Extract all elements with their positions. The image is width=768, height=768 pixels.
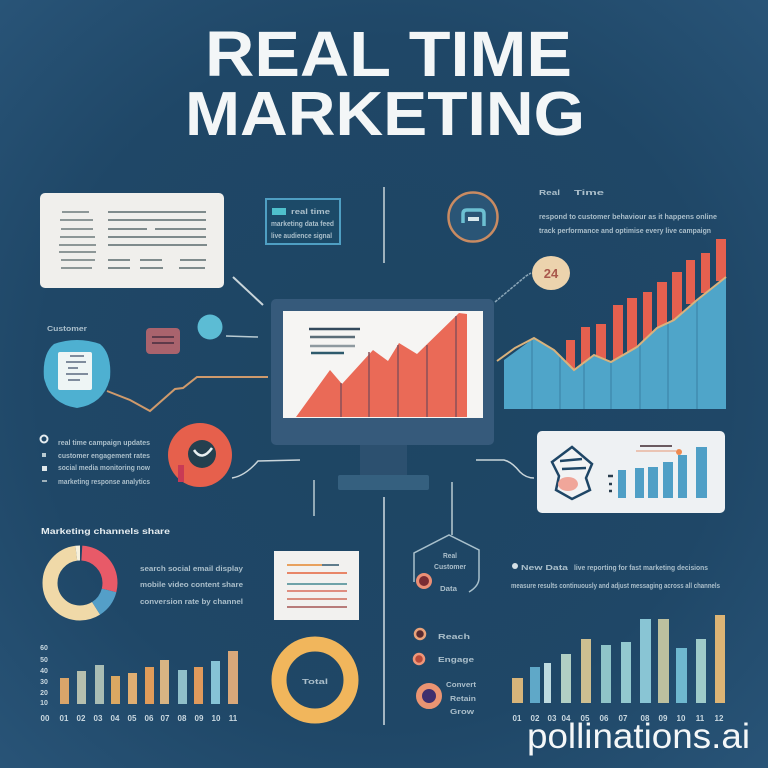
monitor base [338,475,429,490]
connector: red circle [232,460,300,478]
icon: red circle [168,423,232,487]
panel: small blue note card [266,199,340,244]
y axis labels: 40 [40,668,48,675]
bar chart: lower right [512,615,725,723]
icon: pink tag [146,328,180,354]
x axis labels: 10 [212,714,221,723]
card header lines [640,445,672,447]
monitor [271,299,494,490]
text block: lower right: live reporting for fast marketing decisions [574,565,708,572]
x axis labels: 03 [94,714,103,723]
trend line connector [107,377,268,411]
text block: lower right [511,563,720,590]
icon: blue document blob [44,340,110,408]
x axis labels: 04 [562,714,571,723]
legend: lower centre: Grow [450,709,475,716]
y axis labels: 50 [40,657,48,664]
legend: lower centre [414,629,477,716]
legend: lower centre: Engage [438,657,474,664]
hexagon marker [418,574,430,588]
text block: donut description: search social email display [140,566,243,573]
panel: lower right card [537,431,725,513]
blue area [504,277,726,409]
area dividers [532,300,697,409]
trend line [497,277,726,370]
icon: teal circle [198,314,222,340]
x axis labels: 09 [195,714,204,723]
y axis labels: 60 [40,645,48,652]
donut chart [50,553,110,613]
watermark: pollinations.ai [527,717,750,756]
text block: donut description [140,566,243,606]
text list with icons: marketing response analytics [58,479,150,486]
x axis labels: 12 [715,714,724,723]
x axis labels: 11 [696,714,705,723]
icon: hexagon outline: Real [443,553,457,560]
label: blue blob: Customer [47,326,87,333]
x axis labels [513,714,724,723]
x axis labels: 03 [548,714,557,723]
text list with icons: social media monitoring now [58,465,151,472]
panel: white text card [40,193,224,288]
text block: top right: respond to customer behaviour as it happens online [539,214,717,221]
connector: card to monitor [233,277,263,305]
bars [512,615,725,703]
x axis labels: 04 [111,714,120,723]
text block: lower right: measure results continuously and adjust messaging across all channels [511,583,720,590]
text block: top right [539,214,717,235]
title: REAL TIME [205,18,572,90]
bar chart: lower left [40,645,238,723]
title: MARKETING [185,79,585,149]
legend: lower centre: Convert [446,682,477,689]
x axis labels: 02 [77,714,86,723]
x axis labels: 05 [128,714,137,723]
text block: donut description: mobile video content share [140,582,243,589]
text list with icons: real time campaign updates [58,440,150,447]
text block: donut description: conversion rate by channel [140,599,243,606]
y axis labels: 20 [40,690,48,697]
panel: small blue note card: live audience signal [271,233,332,240]
panel: small blue note card: real time [291,209,330,216]
icon: hexagon outline: Data [440,586,457,593]
connector: monitor to lower card [476,460,534,478]
legend: lower centre: Reach [438,634,470,641]
mini bars [618,447,707,498]
icon: hexagon outline: Customer [434,564,466,571]
heading: top right text: Real [539,190,560,197]
monitor body [271,299,494,445]
x axis labels: 10 [677,714,686,723]
text list with icons: customer engagement rates [58,453,150,460]
x axis labels: 11 [229,714,238,723]
icon: orange ring badge [448,192,498,242]
connector: teal circle [226,336,258,337]
axis marks [608,476,613,491]
x axis labels: 01 [513,714,522,723]
divider line: lower left [313,480,315,516]
text block: top right: track performance and optimise every live campaign [539,228,711,235]
panel: small blue note card: marketing data feed [271,221,334,228]
ring chart: Total [302,679,328,686]
x axis labels: 07 [161,714,170,723]
text block: lower right: New Data [521,565,568,572]
x axis labels: 00 [41,714,50,723]
icon: mask [552,447,592,499]
ring chart [279,644,351,716]
icon: beige circle: 24 [544,266,559,281]
red bars [566,239,726,372]
icon: hexagon outline [414,535,479,593]
connector: to hexagon [451,482,453,535]
y axis labels: 10 [40,700,48,707]
title [185,18,585,149]
heading: top right text: Time [574,190,604,197]
x axis labels: 02 [531,714,540,723]
text list with icons [40,436,151,486]
x axis labels: 08 [641,714,650,723]
x axis labels: 06 [145,714,154,723]
x axis labels: 05 [581,714,590,723]
connector: beige circle [495,273,531,302]
screen text lines [309,329,360,353]
y axis labels [40,645,48,707]
icon: beige circle [532,256,570,290]
x axis labels: 06 [600,714,609,723]
bars [60,651,238,704]
panel: report document [274,551,359,620]
screen area chart [296,313,467,417]
heading: top right text [539,190,604,197]
monitor stand [360,444,407,476]
y axis labels: 30 [40,679,48,686]
main chart: bars and area [497,239,726,409]
x axis labels [41,714,238,723]
monitor screen [283,311,483,418]
divider line: top centre [383,187,385,263]
orange marker [676,449,682,455]
divider line: centre [383,497,385,725]
x axis labels: 08 [178,714,187,723]
x axis labels: 07 [619,714,628,723]
x axis labels: 09 [659,714,668,723]
legend: lower centre: Retain [450,696,476,703]
x axis labels: 01 [60,714,69,723]
heading: donut section: Marketing channels share [41,527,171,536]
